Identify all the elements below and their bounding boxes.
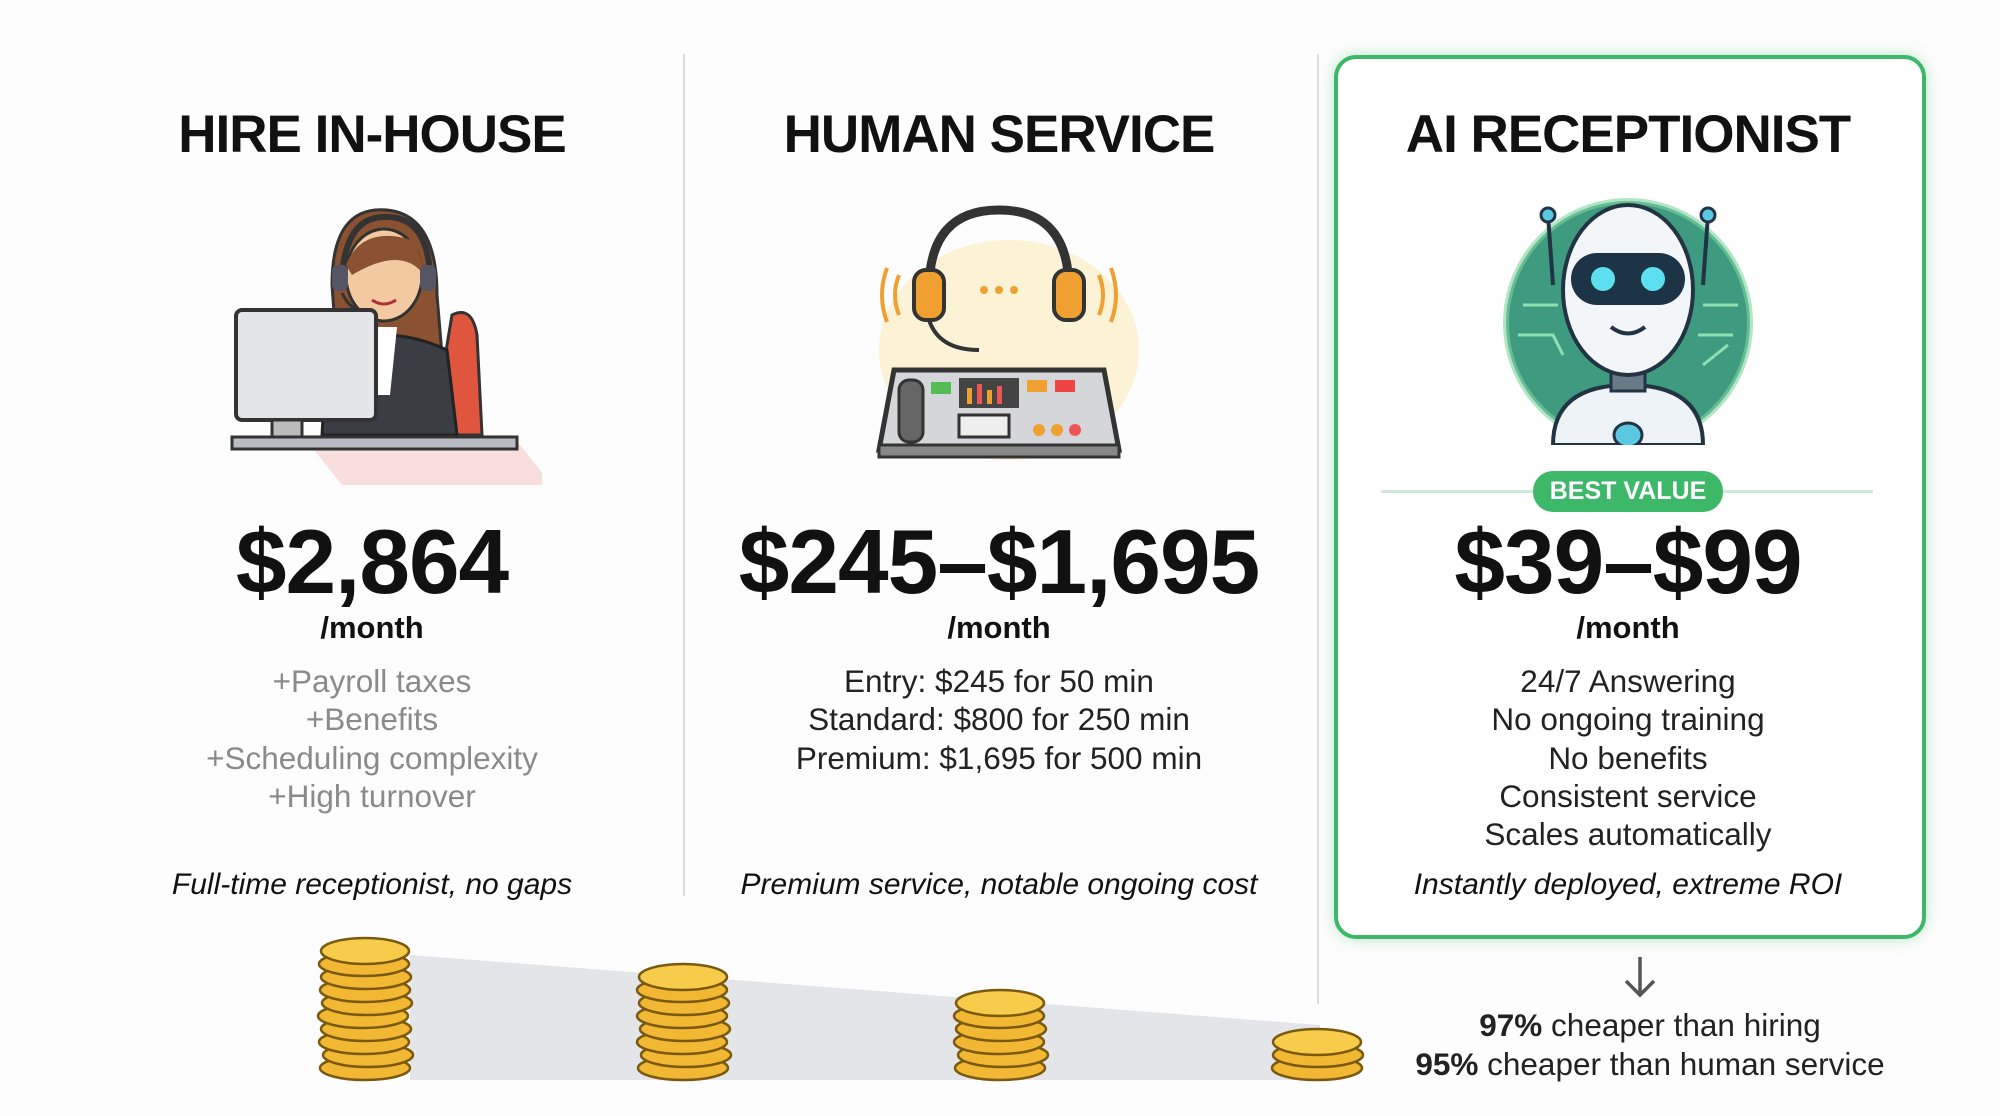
benefits list: Consistent service bbox=[1499, 778, 1757, 814]
unit: /month bbox=[947, 610, 1051, 645]
price: $2,864 bbox=[236, 512, 508, 613]
panel: AI receptionist bbox=[1381, 105, 1873, 901]
icon: robot bbox=[1503, 198, 1753, 445]
benefits list: 24/7 Answering bbox=[1520, 663, 1736, 699]
panel: human service bbox=[739, 105, 1259, 901]
heading: AI RECEPTIONIST bbox=[1406, 105, 1850, 164]
plan list bbox=[796, 663, 1202, 776]
panel: AI receptionist highlight card bbox=[1334, 55, 1926, 939]
price: $245–$1,695 bbox=[739, 512, 1259, 613]
benefits list: Scales automatically bbox=[1484, 816, 1772, 852]
unit: /month bbox=[320, 610, 424, 645]
feature list: +Payroll taxes bbox=[273, 663, 471, 699]
heading: HUMAN SERVICE bbox=[784, 105, 1214, 164]
benefits list: No ongoing training bbox=[1491, 701, 1765, 737]
tagline: Instantly deployed, extreme ROI bbox=[1414, 868, 1842, 901]
callout: savings bbox=[1415, 1007, 1885, 1082]
feature list: +Benefits bbox=[306, 701, 438, 737]
feature list bbox=[206, 663, 538, 814]
plan list: Entry: $245 for 50 min bbox=[844, 663, 1154, 699]
callout: savings: 95% cheaper than human service bbox=[1415, 1046, 1885, 1082]
badge: best value bbox=[1533, 471, 1723, 512]
divider with badge bbox=[1381, 490, 1873, 493]
tagline: Premium service, notable ongoing cost bbox=[741, 868, 1257, 901]
callout: savings: 97% cheaper than hiring bbox=[1479, 1007, 1821, 1043]
badge: best value: BEST VALUE bbox=[1550, 477, 1706, 505]
icon: headset and switchboard bbox=[876, 206, 1139, 460]
benefits list bbox=[1484, 663, 1772, 852]
unit: /month bbox=[1576, 610, 1680, 645]
plan list: Standard: $800 for 250 min bbox=[808, 701, 1190, 737]
benefits list: No benefits bbox=[1548, 740, 1708, 776]
chart: coin stacks decreasing cost bbox=[316, 936, 1364, 1082]
plan list: Premium: $1,695 for 500 min bbox=[796, 740, 1202, 776]
icon: receptionist at computer bbox=[230, 208, 542, 485]
feature list: +Scheduling complexity bbox=[206, 740, 538, 776]
panel: hire in-house bbox=[172, 105, 572, 901]
heading: HIRE IN-HOUSE bbox=[178, 105, 566, 164]
price: $39–$99 bbox=[1454, 512, 1802, 613]
tagline: Full-time receptionist, no gaps bbox=[172, 868, 572, 901]
arrow: down bbox=[1624, 957, 1656, 998]
feature list: +High turnover bbox=[268, 778, 476, 814]
